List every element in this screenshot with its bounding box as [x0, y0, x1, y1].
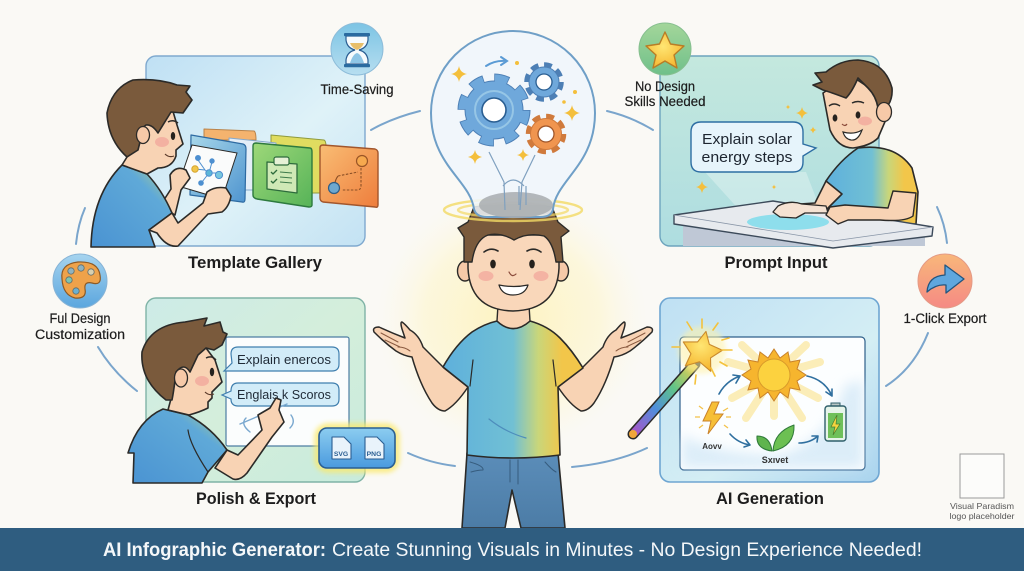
hourglass icon — [331, 23, 383, 75]
ears — [458, 261, 472, 281]
far hand on table — [773, 202, 828, 218]
speech bubble — [691, 122, 816, 172]
logo placeholder: logo placeholder — [950, 511, 1015, 521]
button base — [319, 428, 395, 468]
file icon: PNG: PNG — [367, 451, 381, 458]
logo placeholder: Visual Paradism — [950, 501, 1014, 511]
hologram beam — [705, 172, 826, 224]
badge label: No Design — [635, 79, 695, 94]
button glow — [314, 423, 400, 473]
bulb glass — [431, 31, 595, 217]
tablet network diagram — [192, 156, 223, 185]
wand star glow — [678, 326, 726, 374]
magic wand — [629, 319, 732, 438]
lightning bolt icon — [695, 402, 731, 434]
connector arcs around the central figure — [76, 111, 947, 467]
right hand finger lines — [616, 333, 645, 351]
sun with rays — [728, 345, 820, 418]
boy at table — [773, 60, 918, 224]
badge: 1-click export — [904, 254, 987, 326]
leaves icon — [757, 425, 794, 451]
sleeve seams — [470, 360, 556, 386]
text bubble 1 — [224, 347, 339, 371]
star icon — [639, 23, 691, 75]
banner title: AI Infographic Generator: — [103, 540, 326, 561]
text bubble 1: Explain enercos — [237, 353, 331, 367]
boy editing with finger — [128, 318, 284, 483]
badge label line 2: Skills Needed — [624, 94, 706, 109]
panel: prompt input — [660, 56, 933, 272]
panel: template gallery — [91, 56, 378, 272]
right ear — [554, 261, 568, 281]
tablet — [178, 145, 237, 199]
palette icon — [53, 254, 107, 308]
t-shirt — [443, 321, 583, 458]
boy facial features — [195, 357, 216, 395]
badge label line 2: Customization — [35, 327, 125, 342]
panel background — [660, 298, 879, 482]
hologram glow on table — [747, 214, 829, 230]
template cards — [190, 129, 378, 207]
right arm and open hand — [558, 322, 652, 411]
window blue wash — [682, 380, 863, 468]
central figure — [374, 202, 652, 528]
editing scribble — [240, 404, 293, 432]
footer banner — [0, 528, 1024, 571]
gear: orange — [529, 117, 563, 151]
panel label: AI generation: AI Generation — [716, 489, 824, 508]
left arm and open hand — [374, 322, 468, 411]
gear: small blue — [528, 66, 560, 98]
near arm and hand on table — [826, 191, 916, 224]
speech bubble: energy steps — [702, 149, 792, 166]
process arrows — [719, 375, 832, 447]
table — [674, 201, 933, 248]
eyebrows — [484, 249, 541, 252]
gear: large blue — [463, 79, 525, 141]
neck — [497, 305, 530, 328]
bulb base — [479, 192, 553, 218]
editor window — [226, 337, 349, 446]
panel background — [146, 56, 365, 246]
yellow glow behind central figure — [377, 190, 647, 450]
wand star — [678, 327, 726, 373]
rotation arrow — [486, 57, 507, 66]
boy with tablet — [91, 80, 231, 247]
badge label: 1-Click Export — [904, 311, 987, 326]
badge: time-saving — [320, 23, 394, 97]
panel label: polish and export: Polish & Export — [196, 489, 316, 508]
cheeks — [478, 271, 548, 281]
halo rings under bulb — [444, 199, 582, 221]
lightbulb with gears — [431, 31, 595, 218]
badge: full design customization — [35, 254, 125, 342]
pants details — [470, 460, 556, 484]
garbled icon label: bottom: Sxıvet — [762, 455, 788, 465]
pants — [462, 453, 565, 528]
panel background — [660, 56, 879, 246]
smile — [499, 285, 528, 295]
boy facial features — [829, 102, 872, 140]
wand star rays — [672, 319, 732, 384]
output window — [680, 337, 865, 470]
panel label: template gallery: Template Gallery — [188, 253, 323, 272]
badge label: Ful Design — [50, 311, 110, 326]
file icon: SVG: SVG — [334, 451, 348, 458]
boy facial features — [155, 121, 178, 157]
banner subtitle: Create Stunning Visuals in Minutes - No Design Experience Needed! — [332, 540, 922, 561]
hair — [458, 202, 569, 262]
nose — [509, 272, 516, 276]
logo placeholder — [950, 454, 1015, 521]
badge: no design skills needed — [624, 23, 706, 109]
text bubble 2: Englais k Scoros — [237, 388, 331, 402]
export arrow icon — [918, 254, 972, 308]
sparkles — [696, 104, 816, 193]
left hand finger lines — [381, 333, 410, 351]
panel: AI generation — [629, 298, 879, 508]
export buttons: SVG and PNG — [314, 423, 400, 473]
bulb sparkles — [451, 61, 580, 164]
battery icon — [825, 403, 846, 441]
speech bubble: Explain solar — [702, 131, 792, 148]
face — [468, 235, 559, 311]
panel: polish and export — [128, 298, 400, 508]
t-shirt fold — [489, 419, 526, 438]
filament — [489, 152, 535, 210]
panel label: prompt input: Prompt Input — [724, 253, 828, 272]
panel background — [146, 298, 365, 482]
garbled icon label: left: Aovv — [702, 442, 722, 451]
badge label: Time-Saving — [320, 82, 394, 97]
text bubble 2 — [222, 383, 339, 406]
eyes — [490, 260, 535, 268]
